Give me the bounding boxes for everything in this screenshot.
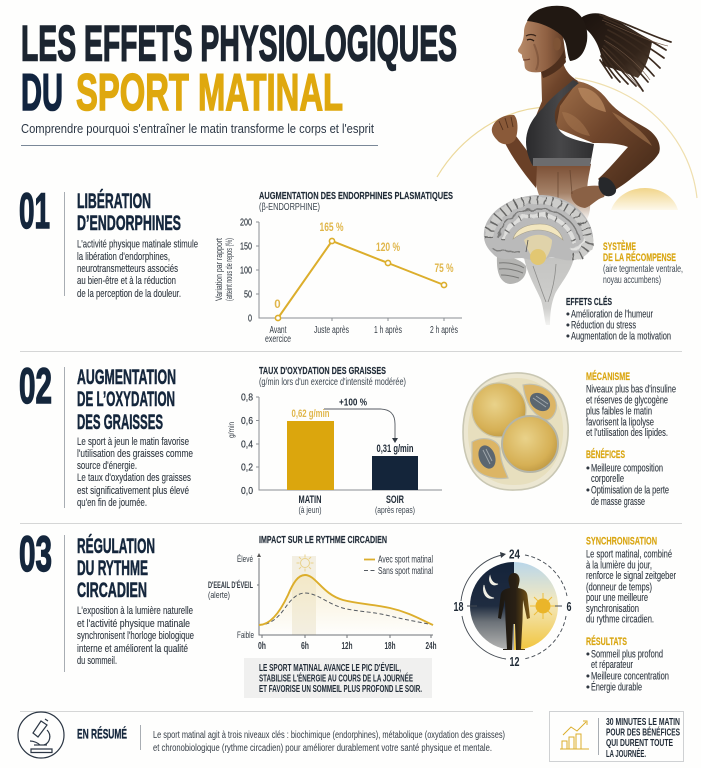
clock numbers: 6 <box>566 599 572 614</box>
silhouette <box>498 573 530 650</box>
corpus callosum <box>513 224 563 240</box>
heading: AUGMENTATION <box>77 366 176 389</box>
line chart: rythme circadien: 12h <box>342 641 352 652</box>
text: mecanisme et benefices: favorisent la lipolyse <box>586 416 654 428</box>
text: synchronisation et resultats: à la lumière du jour, <box>586 560 652 572</box>
text: mecanisme et benefices: plus faibles le matin <box>586 406 652 418</box>
icon: sun <box>296 554 314 572</box>
small cell top right <box>523 384 556 420</box>
line chart: rythme circadien: Faible <box>237 630 254 641</box>
text: synchronisation et resultats: et réparateur <box>591 659 633 671</box>
bar chart: oxydation: (g/min lors d'un exercice d'intensité modérée) <box>259 376 406 388</box>
bar chart: oxydation: 0,4 <box>241 438 253 450</box>
bar chart: oxydation: 0,8 <box>241 392 253 404</box>
big lipid droplet <box>502 416 558 472</box>
ponytail <box>578 13 671 91</box>
bar chart: oxydation: g/min <box>227 422 236 438</box>
ring with arrows <box>461 555 567 659</box>
callout: 30 minutes <box>550 712 684 762</box>
illustration: brain <box>484 195 593 325</box>
reward system core <box>524 235 552 262</box>
arrow +100 %: +100 % <box>339 396 368 408</box>
legend: Avec sport matinal <box>378 554 433 566</box>
number 01: 01 <box>19 183 50 239</box>
callout: reward system: noyau accumbens) <box>603 274 661 286</box>
line chart: endorphines: (β-ENDORPHINE) <box>259 201 320 213</box>
text: mecanisme et benefices: • <box>586 462 590 474</box>
body text: interne et améliorent la qualité <box>77 643 188 655</box>
panel: section 03 rythme <box>19 526 194 672</box>
bar: soir <box>372 456 418 490</box>
text: mecanisme et benefices: corporelle <box>591 473 624 485</box>
text: synchronisation et resultats: synchronisation <box>586 603 639 615</box>
gyri folds <box>489 200 589 257</box>
heading: RÉGULATION <box>77 535 155 558</box>
body text: synchronisent l'horloge biologique <box>77 630 194 642</box>
line chart: endorphines: 1 h après <box>374 325 402 336</box>
small cell bottom left <box>472 439 508 478</box>
cerebellum <box>497 256 526 284</box>
body text <box>77 436 193 509</box>
heading: LIBÉRATION <box>77 190 151 213</box>
callout: reward system: SYSTÈME <box>603 240 636 253</box>
callout: circadian note: STABILISE L'ÉNERGIE AU COURS DE LA JOURNÉE <box>259 672 413 684</box>
hand on hip <box>571 186 608 208</box>
heading: D’ENDORPHINES <box>77 212 181 235</box>
bar chart: oxydation <box>227 365 442 516</box>
bar chart: oxydation: MATIN <box>298 494 322 506</box>
body text <box>77 605 194 667</box>
line chart: rythme circadien <box>208 534 436 652</box>
body text: Le taux d'oxydation des graisses <box>77 472 191 484</box>
heading <box>77 535 155 602</box>
line chart: endorphines: 75 % <box>434 263 454 275</box>
line chart: endorphines: 120 % <box>376 242 400 254</box>
illustration: runner <box>492 6 671 222</box>
bar chart: oxydation: (à jeun) <box>298 505 322 516</box>
subtitle: Comprendre pourquoi s'entraîner le matin transforme le corps et l'esprit <box>21 121 374 136</box>
text: mecanisme et benefices: • <box>586 484 590 496</box>
body text: et l'activité physique matinale <box>77 618 190 630</box>
body text: est significativement plus élevé <box>77 485 189 497</box>
axis label <box>214 238 234 301</box>
line chart: endorphines: 150 <box>240 240 252 252</box>
facial features <box>523 34 538 70</box>
text: mecanisme et benefices: MÉCANISME <box>586 370 630 383</box>
key effects <box>566 295 671 342</box>
heading: DE L’OXYDATION <box>77 388 175 411</box>
heading: DES GRAISSES <box>77 411 163 434</box>
body text: qu'en fin de journée. <box>77 497 147 509</box>
text: synchronisation et resultats: • <box>586 682 590 694</box>
back arm and shoulder <box>556 81 660 192</box>
curve: avec sport matinal <box>259 575 433 625</box>
head / face <box>518 14 566 72</box>
day half <box>514 562 558 650</box>
panel: section 01 endorphines <box>19 183 198 300</box>
muscle highlights <box>578 88 606 112</box>
heading: DU RYTHME <box>77 557 148 580</box>
chart title: AUGMENTATION DES ENDORPHINES PLASMATIQUES <box>259 190 453 202</box>
number 02: 02 <box>19 358 52 414</box>
bar chart: oxydation: (après repas) <box>375 505 415 516</box>
decorative gold arc and sun behind runner <box>437 78 697 210</box>
cerebrum <box>484 195 593 260</box>
brain stem <box>524 258 574 325</box>
summary text <box>153 730 505 754</box>
ear <box>553 38 561 50</box>
morning band <box>292 556 316 635</box>
callout: reward system <box>603 240 683 286</box>
watch <box>598 177 616 196</box>
axis label: Variation par rapport <box>214 238 224 301</box>
bar chart: oxydation: SOIR <box>386 494 404 506</box>
text: synchronisation et resultats: SYNCHRONISATION <box>586 536 657 548</box>
summary heading: EN RÉSUMÉ <box>77 726 127 742</box>
heading: CIRCADIEN <box>77 579 147 602</box>
line chart: rythme circadien: D'EEAIL D'ÉVEIL <box>208 580 253 591</box>
key effects: Réduction du stress <box>571 320 636 332</box>
line chart: rythme circadien: Élevé <box>237 554 253 565</box>
legend: Sans sport matinal <box>378 566 433 577</box>
body text: L'exposition à la lumière naturelle <box>77 605 193 617</box>
illustration: fat cell <box>463 373 568 490</box>
line chart: endorphines: Avant <box>270 325 287 336</box>
title: SPORT MATINAL <box>76 64 343 122</box>
front forearm <box>504 136 537 188</box>
number 03: 03 <box>19 526 52 582</box>
icon: sun <box>530 593 556 619</box>
body text: neurotransmetteurs associés <box>77 263 178 275</box>
body text: l'utilisation des graisses comme <box>77 448 193 460</box>
big lipid droplet <box>472 383 526 437</box>
neck and chest <box>531 58 578 128</box>
clock numbers: 24 <box>509 546 521 562</box>
body text: du sommeil. <box>77 655 117 667</box>
body text <box>77 238 198 300</box>
legend <box>364 554 433 577</box>
axis label: (atteint nous de repos (%) <box>224 238 234 301</box>
line chart: endorphines: exercice <box>265 334 291 345</box>
heading <box>77 366 176 434</box>
text: synchronisation et resultats: Sommeil plus profond <box>591 648 663 660</box>
heading <box>77 190 181 235</box>
chart title: IMPACT SUR LE RYTHME CIRCADIEN <box>259 534 387 546</box>
text: mecanisme et benefices <box>586 370 676 508</box>
icon: growth chart <box>560 721 589 749</box>
line chart: rythme circadien: (alerte) <box>208 590 230 601</box>
body text: au bien-être et à la réduction <box>77 275 176 287</box>
bar chart: oxydation: 0,0 <box>241 485 253 497</box>
summary text: Le sport matinal agit à trois niveaux clés : biochimique (endorphines), métabolique (oxydation des graisses) <box>153 730 505 741</box>
icon: moons <box>483 576 498 598</box>
line chart: endorphines: 0 <box>274 299 281 311</box>
panel: section 02 graisses <box>19 358 193 509</box>
text: synchronisation et resultats: • <box>586 670 590 682</box>
fist <box>492 115 518 144</box>
clock numbers: 12 <box>510 654 520 669</box>
bar chart: oxydation: 0,31 g/min <box>376 443 414 455</box>
key effects: • <box>566 330 570 342</box>
waist and hip <box>533 164 591 222</box>
clock numbers: 18 <box>454 599 464 614</box>
line chart: rythme circadien: 24h <box>426 641 436 652</box>
bar chart: oxydation: 0,2 <box>241 462 253 474</box>
text: synchronisation et resultats: Énergie durable <box>591 680 642 694</box>
body text: la libération d'endorphines, <box>77 251 170 263</box>
bar: matin <box>287 421 334 490</box>
key effects: EFFETS CLÉS <box>566 295 612 308</box>
line chart: endorphines: 2 h après <box>430 325 458 336</box>
text: mecanisme et benefices: de masse grasse <box>591 496 645 508</box>
key effects: • <box>566 320 570 332</box>
sports bra <box>526 80 594 166</box>
hair <box>527 6 587 61</box>
line chart: endorphines: 200 <box>240 216 252 228</box>
text: mecanisme et benefices: Meilleure composition <box>591 462 663 474</box>
line chart: rythme circadien: 6h <box>301 641 309 652</box>
chart title: TAUX D'OXYDATION DES GRAISSES <box>259 365 386 377</box>
key effects: Amélioration de l'humeur <box>571 308 653 320</box>
text: mecanisme et benefices: BÉNÉFICES <box>586 448 625 461</box>
text: synchronisation et resultats <box>586 536 676 694</box>
text: synchronisation et resultats: RÉSULTATS <box>586 635 627 648</box>
body text: L'activité physique matinale stimule <box>77 238 198 250</box>
line chart: rythme circadien: 0h <box>258 641 266 652</box>
title <box>21 16 457 122</box>
clock numbers <box>454 546 572 669</box>
bar chart: oxydation: 0,62 g/min <box>292 408 330 420</box>
body text: source d'énergie. <box>77 460 137 472</box>
line chart: endorphines: 50 <box>244 288 252 300</box>
text: synchronisation et resultats: (donneur de temps) <box>586 582 652 594</box>
callout: circadian note: LE SPORT MATINAL AVANCE LE PIC D'ÉVEIL, <box>259 661 401 674</box>
callout: 30 minutes: LA JOURNÉE. <box>606 747 646 760</box>
summary text: et chronobiologique (rythme circadien) pour améliorer durablement votre santé physique et mentale. <box>153 743 492 754</box>
arrow +100 % <box>324 396 398 443</box>
line chart: endorphines: Juste après <box>314 325 349 336</box>
line chart: endorphines <box>214 190 462 345</box>
key effects: • <box>566 308 570 320</box>
text: synchronisation et resultats: • <box>586 648 590 660</box>
callout: circadian note: ET FAVORISE UN SOMMEIL PLUS PROFOND LE SOIR. <box>259 684 422 695</box>
illustration: circadian clock <box>454 546 572 669</box>
line chart: endorphines: 0 <box>248 312 252 324</box>
night half <box>470 562 514 650</box>
line chart: rythme circadien: 18h <box>384 641 396 652</box>
text: synchronisation et resultats: du rythme circadien. <box>586 614 654 626</box>
curve: sans sport matinal <box>259 593 433 625</box>
callout: circadian note <box>244 658 432 698</box>
body text: de la perception de la douleur. <box>77 288 181 300</box>
line chart: endorphines: 100 <box>240 264 252 276</box>
bar chart: oxydation: 0,6 <box>241 415 253 427</box>
text: synchronisation et resultats: pour une meilleure <box>586 592 648 604</box>
icon: microscope <box>18 712 64 758</box>
body text: Le sport à jeun le matin favorise <box>77 436 189 448</box>
line chart: endorphines: 165 % <box>320 222 344 234</box>
title: DU <box>21 64 63 122</box>
